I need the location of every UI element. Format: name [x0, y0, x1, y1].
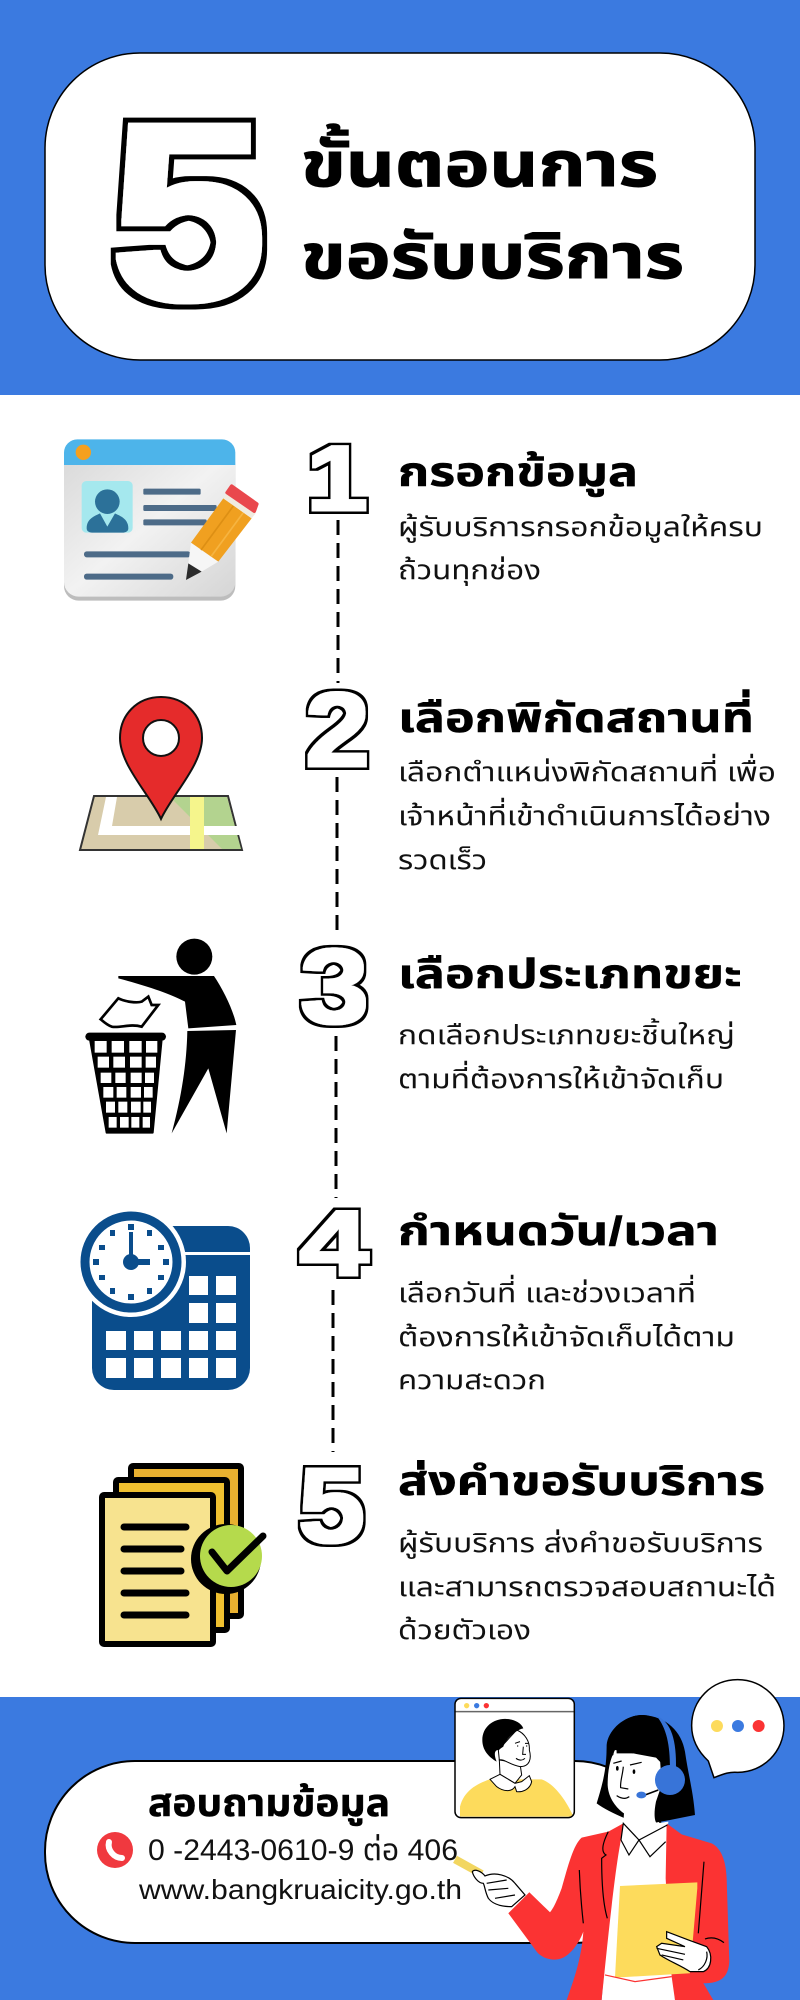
website: www.bangkruaicity.go.th: [138, 1874, 462, 1905]
contact heading: สอบถามข้อมูล: [148, 1783, 390, 1826]
illustration: speech bubble: [692, 1680, 784, 1778]
icon: calendar and clock: [76, 1207, 250, 1390]
illustration: video call window: [455, 1698, 574, 1818]
icon: map pin: [80, 697, 242, 850]
step 2 text: [398, 689, 776, 875]
contact pill: [45, 1761, 665, 1943]
step 1 text: ถ้วนทุกช่อง: [398, 555, 541, 586]
panel: contact footer: [0, 1680, 800, 2000]
step 3 text: กดเลือกประเภทขยะชิ้นใหญ่: [398, 1018, 735, 1050]
icon: person throwing litter in bin: [85, 939, 236, 1133]
step 3 text: ตามที่ต้องการให้เข้าจัดเก็บ: [398, 1060, 724, 1094]
step 2 text: เลือกพิกัดสถานที่: [398, 689, 754, 741]
numeral 2: 2: [305, 672, 370, 789]
illustration: customer service woman: [455, 1715, 729, 2000]
step 5 text: และสามารถตรวจสอบสถานะได้: [398, 1572, 776, 1602]
title card: [45, 53, 755, 360]
title: [301, 123, 684, 292]
step 2 text: รวดเร็ว: [398, 845, 487, 875]
timeline dashed connectors: [333, 520, 338, 1452]
step 5 text: ผู้รับบริการ ส่งคำขอรับบริการ: [398, 1528, 763, 1559]
panel: header band: [0, 0, 800, 395]
title: ขอรับบริการ: [301, 223, 684, 292]
numeral 1: 1: [306, 428, 368, 530]
step 5 text: ด้วยตัวเอง: [398, 1615, 531, 1645]
step 4 text: ความสะดวก: [398, 1365, 546, 1395]
step 5 text: [398, 1458, 776, 1645]
step 3 text: [398, 951, 742, 1094]
step 2 text: เจ้าหน้าที่เข้าดำเนินการได้อย่าง: [398, 797, 771, 831]
step 4 text: เลือกวันที่ และช่วงเวลาที่: [398, 1274, 696, 1308]
step 4 text: ต้องการให้เข้าจัดเก็บได้ตาม: [398, 1322, 735, 1352]
icon: form with pencil: [64, 439, 257, 601]
panel: step 3: [85, 928, 742, 1133]
step 4 text: กำหนดวัน/เวลา: [398, 1208, 719, 1254]
panel: step 1: [64, 428, 763, 601]
step 1 text: [398, 449, 763, 586]
step 1 text: กรอกข้อมูล: [398, 449, 638, 497]
step 2 text: เลือกตำแหน่งพิกัดสถานที่ เพื่อ: [398, 753, 776, 787]
panel: step 2: [80, 672, 776, 875]
icon: phone: [97, 1832, 133, 1868]
big outlined numeral 5: 5: [110, 72, 267, 353]
step 5 text: ส่งคำขอรับบริการ: [398, 1458, 765, 1504]
title: ขั้นตอนการ: [301, 123, 658, 200]
numeral 5: 5: [298, 1447, 365, 1565]
step 4 text: [398, 1208, 735, 1395]
numeral 3: 3: [300, 928, 369, 1046]
panel: step 5: [102, 1447, 776, 1645]
phone number: 0 -2443-0610-9 ต่อ 406: [148, 1834, 458, 1867]
icon: documents with check mark: [102, 1466, 263, 1644]
panel: step 4: [76, 1193, 735, 1395]
numeral 4: 4: [299, 1193, 369, 1295]
step 3 text: เลือกประเภทขยะ: [398, 951, 742, 997]
step 1 text: ผู้รับบริการกรอกข้อมูลให้ครบ: [398, 512, 763, 543]
